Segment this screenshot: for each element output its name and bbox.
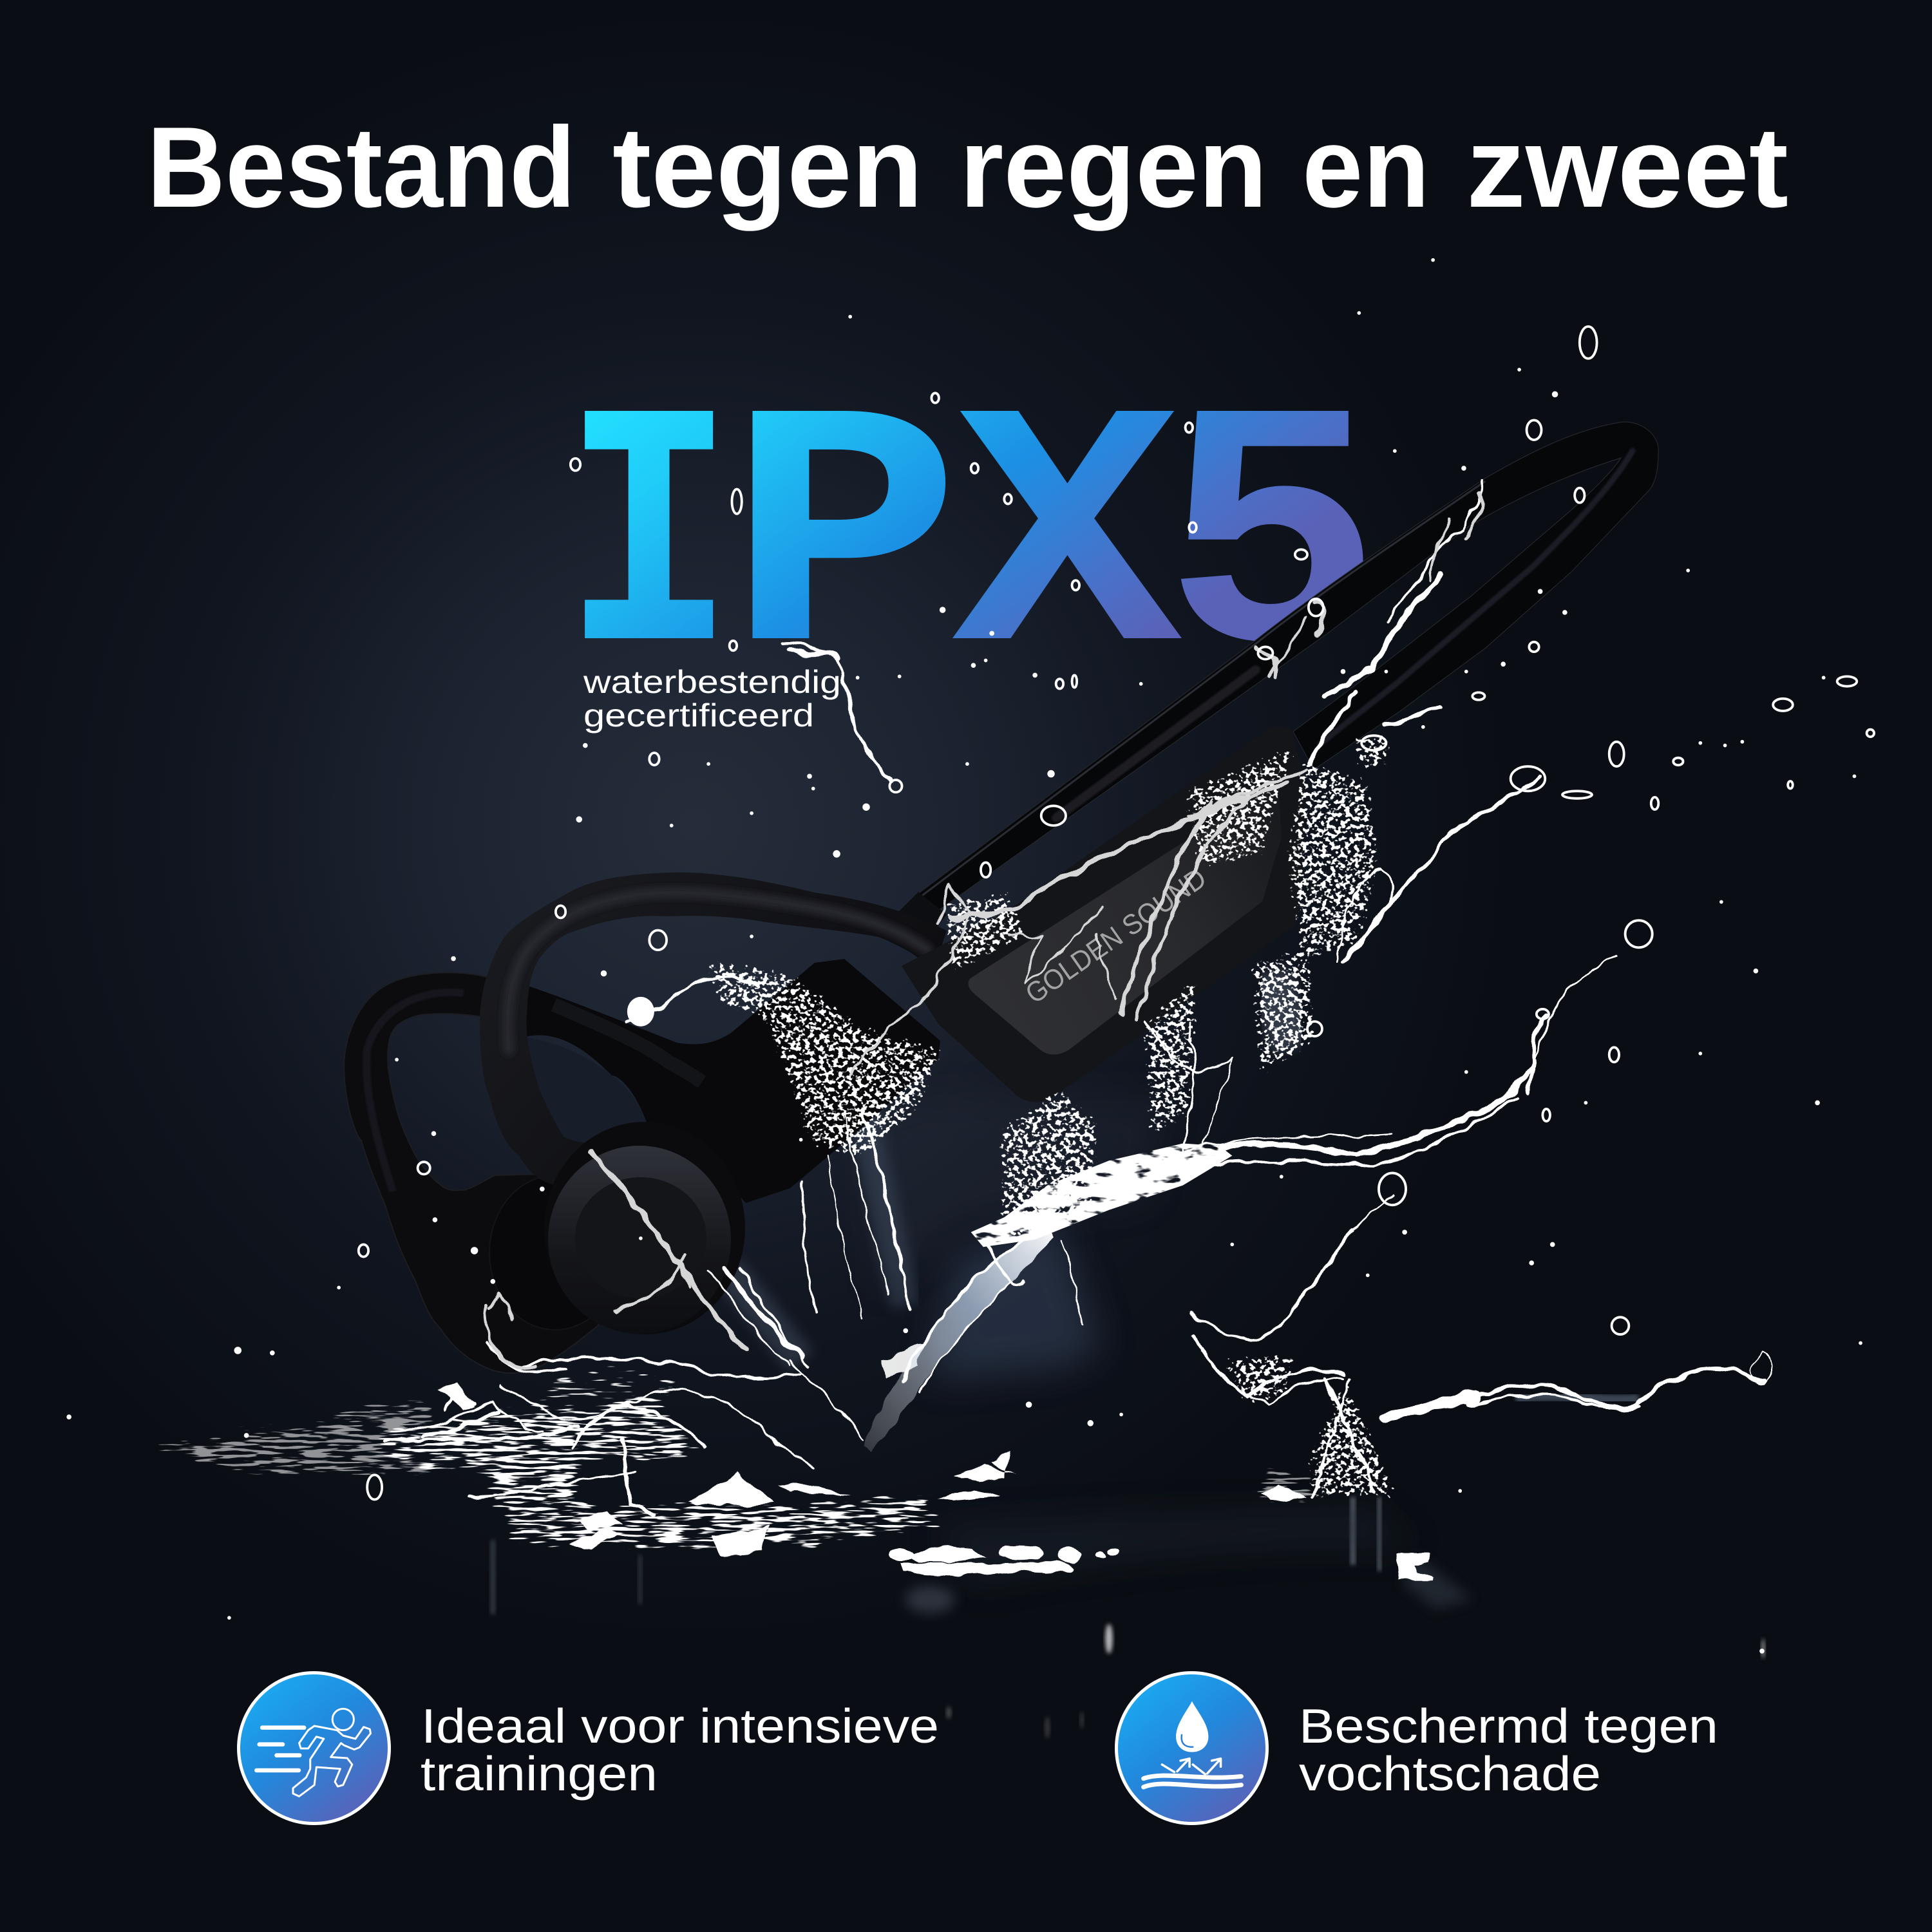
back ear hook bbox=[344, 972, 618, 1373]
badge: runner icon bbox=[238, 1673, 389, 1824]
text: moisture protection benefit: vochtschade bbox=[1299, 1747, 1601, 1801]
main stream mass bbox=[862, 1144, 1232, 1452]
front hook highlight bbox=[507, 893, 927, 1050]
badge: water drop icon bbox=[1117, 1673, 1267, 1824]
text: training benefit bbox=[421, 1699, 939, 1801]
front bud ring bbox=[544, 1122, 745, 1334]
bright pools on the floor bbox=[437, 1343, 1433, 1581]
housing panel with brand name: GOLDEN SOUND bbox=[1020, 862, 1212, 1010]
translucent falling water sheet bbox=[727, 973, 1639, 1400]
IPX5 rating heading bbox=[563, 351, 1382, 742]
title: Bestand bbox=[147, 103, 576, 231]
dense floor streaks bbox=[370, 1356, 949, 1555]
feature: Ideaal voor intensieve trainingen bbox=[238, 1673, 939, 1824]
text: training benefit: trainingen bbox=[421, 1747, 658, 1801]
IPX5 rating heading: I bbox=[563, 351, 735, 742]
white water lines bbox=[382, 479, 1773, 1515]
front ear hook bbox=[480, 873, 947, 1185]
title: regen bbox=[960, 103, 1267, 231]
triangular opening in the arm bbox=[526, 1037, 647, 1146]
battery housing bbox=[902, 726, 1307, 1103]
front bud disc bbox=[548, 1146, 731, 1334]
rear bud disc bbox=[489, 1175, 621, 1330]
title: tegen bbox=[612, 103, 923, 231]
title: zweet bbox=[1466, 103, 1788, 231]
text: moisture protection benefit: Beschermd tegen bbox=[1299, 1699, 1718, 1753]
water splash bbox=[66, 258, 1874, 1654]
title bbox=[147, 103, 1788, 231]
connecting arm and driver housing bbox=[489, 959, 940, 1203]
water running over the headphones bbox=[483, 493, 1481, 1368]
floor reflection glow bbox=[490, 1497, 1765, 1739]
filled droplets bbox=[66, 258, 1862, 1654]
front bud dimple bbox=[575, 1177, 706, 1298]
water ring droplets bbox=[359, 327, 1874, 1499]
feature: Beschermd tegen vochtschade bbox=[1117, 1673, 1718, 1824]
caption: waterbestendig gecertificeerd: gecertificeerd bbox=[583, 697, 814, 734]
neckband bbox=[917, 422, 1658, 911]
headphones: open-ear bone conduction product bbox=[344, 422, 1658, 1373]
text: moisture protection benefit bbox=[1299, 1699, 1718, 1801]
neckband highlights bbox=[921, 451, 1633, 896]
arm highlight bbox=[554, 1005, 702, 1082]
IPX5 rating heading: P bbox=[726, 351, 962, 742]
housing panel with brand name bbox=[968, 782, 1282, 1055]
back hook highlight bbox=[366, 992, 464, 1191]
caption: waterbestendig gecertificeerd bbox=[583, 664, 841, 734]
speckled water texture bbox=[696, 730, 1405, 1501]
dim streaks on the left of the floor bbox=[111, 1386, 1325, 1510]
title: en bbox=[1302, 103, 1430, 231]
caption: waterbestendig gecertificeerd: waterbestendig bbox=[583, 664, 841, 700]
neck collar bbox=[891, 892, 947, 940]
text: training benefit: Ideaal voor intensieve bbox=[421, 1699, 939, 1753]
IPX5 rating heading: 5 bbox=[1162, 351, 1382, 742]
IPX5 rating heading: X bbox=[952, 351, 1185, 742]
